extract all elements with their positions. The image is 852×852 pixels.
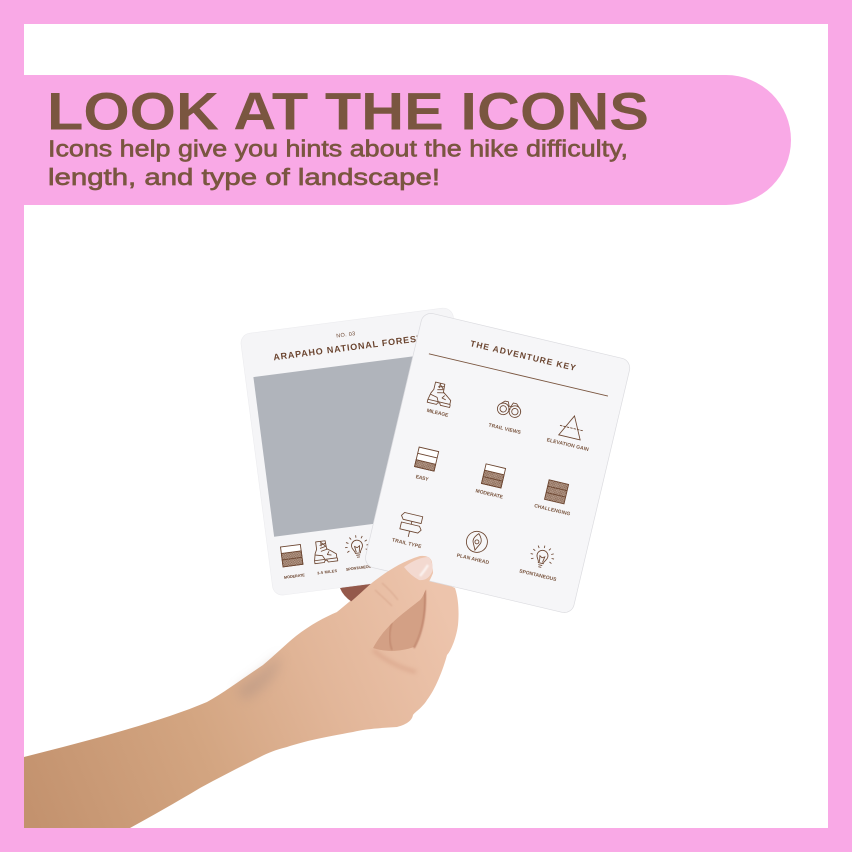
knuckle creases <box>375 583 398 606</box>
hand and arm behind the cards <box>24 578 459 828</box>
key: spontaneous: SPONTANEOUS <box>519 568 558 583</box>
finger separation line <box>390 622 392 650</box>
key: challenging <box>533 478 577 518</box>
card title: THE ADVENTURE KEY <box>469 338 577 373</box>
divider rule <box>429 354 608 396</box>
hidden finger behind card <box>340 580 376 602</box>
icon: 3-5 miles: 3-5 MILES <box>317 569 338 576</box>
thumbnail highlight <box>420 565 428 576</box>
palm crease <box>373 650 416 672</box>
key: challenging: CHALLENGING <box>533 503 571 518</box>
card title: ARAPAHO NATIONAL FOREST <box>273 333 423 362</box>
key: elevation gain <box>546 411 596 453</box>
key: trail type: TRAIL TYPE <box>391 537 423 550</box>
wrist shading <box>236 655 280 700</box>
grey photo placeholder <box>253 352 470 537</box>
key: moderate: MODERATE <box>475 488 504 501</box>
card body <box>363 311 632 615</box>
key: easy: EASY <box>415 474 430 483</box>
title: LOOK AT THE ICONS <box>47 82 649 142</box>
subtitle: Icons help give you hints about the hike difficulty, <box>48 136 628 162</box>
fingers in shadow <box>373 584 425 651</box>
back card: Arapaho National Forest <box>240 307 486 596</box>
icon: 3-5 miles <box>312 539 339 576</box>
icon: spontaneous: SPONTANEOUS <box>346 564 374 572</box>
arm and palm <box>24 578 459 828</box>
card body <box>240 307 486 596</box>
key: plan ahead: PLAN AHEAD <box>456 553 490 566</box>
thumb shape <box>337 556 433 648</box>
key: trail type <box>391 511 429 550</box>
key: trail views <box>488 399 528 436</box>
key: mileage <box>425 381 456 419</box>
key: plan ahead <box>456 528 496 566</box>
key: trail views: TRAIL VIEWS <box>488 422 522 436</box>
key: mileage: MILEAGE <box>426 408 449 419</box>
card number: NO. 03 <box>336 331 356 340</box>
finger crease <box>414 590 425 648</box>
front card: The Adventure Key <box>363 311 632 615</box>
key: easy <box>412 447 439 484</box>
icon: moderate: MODERATE <box>284 573 306 580</box>
key: elevation gain: ELEVATION GAIN <box>546 437 590 453</box>
icon: moderate <box>280 544 306 580</box>
header banner <box>24 75 791 205</box>
key: spontaneous <box>519 541 564 583</box>
thumb over the cards <box>337 556 433 648</box>
thumbnail <box>404 557 433 580</box>
icon: spontaneous <box>342 533 374 572</box>
key: moderate <box>475 463 510 501</box>
banner shape <box>24 75 791 205</box>
subtitle: length, and type of landscape! <box>48 164 440 190</box>
